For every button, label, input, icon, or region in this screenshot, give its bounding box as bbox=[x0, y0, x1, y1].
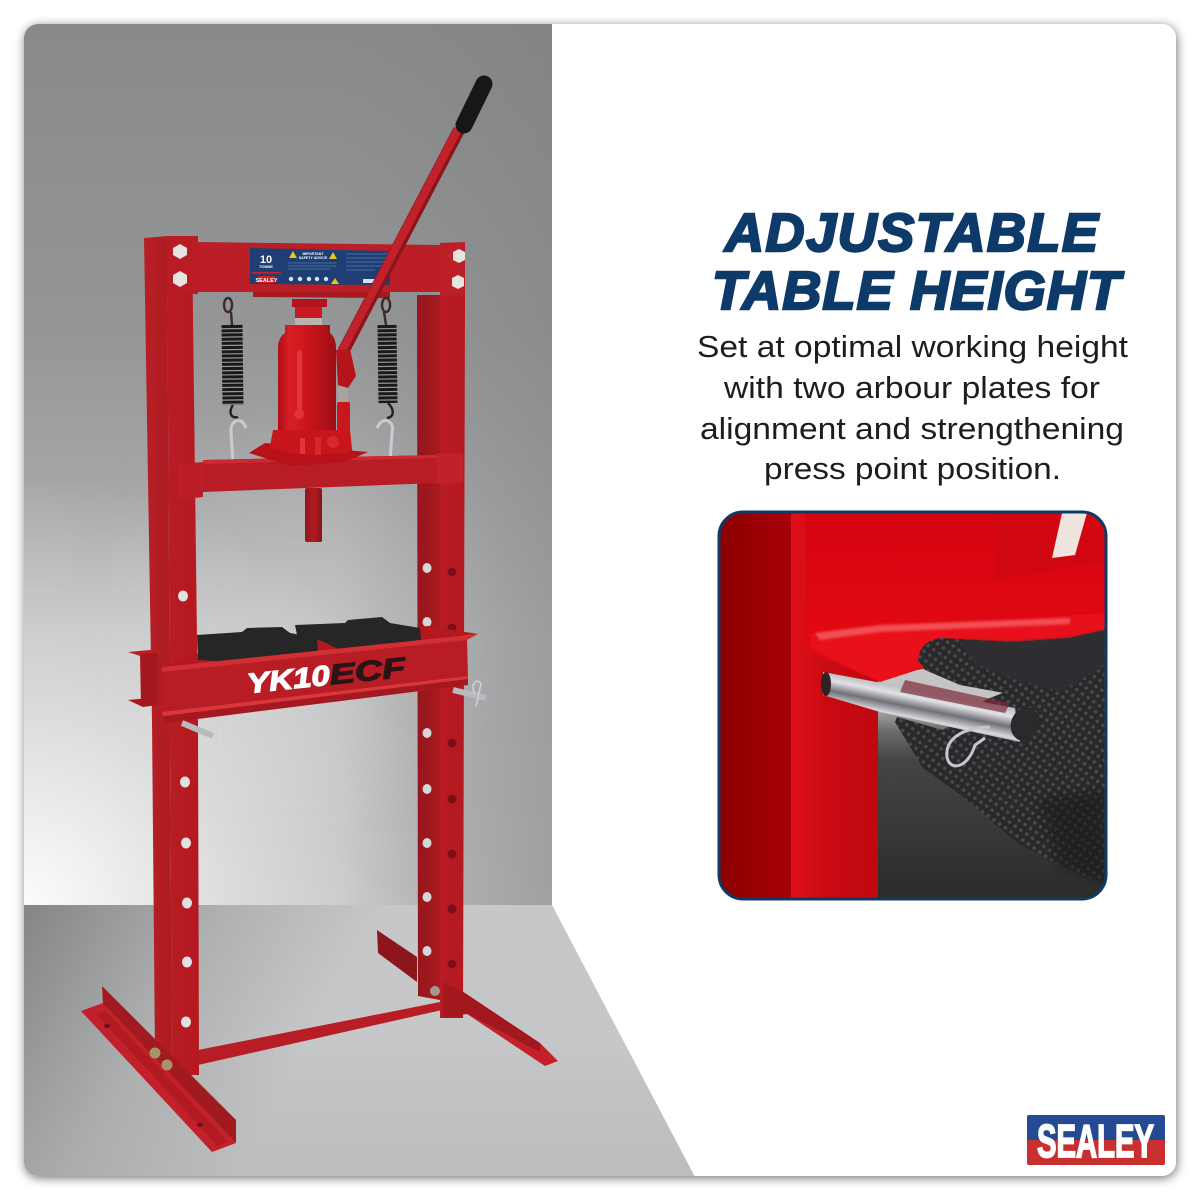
body text: Set at optimal working height bbox=[697, 329, 1128, 364]
left column holes bbox=[178, 590, 192, 1028]
upper glove finger bbox=[918, 630, 1107, 885]
left bracket with bolts bbox=[167, 236, 198, 295]
safety label: IMPORTANT bbox=[302, 252, 324, 256]
body text: press point position. bbox=[764, 451, 1061, 486]
locking pins bbox=[182, 681, 486, 744]
left spring and hook bbox=[224, 298, 246, 462]
main beam bbox=[162, 637, 468, 715]
table bed bbox=[128, 617, 486, 744]
hydraulic press illustration bbox=[81, 84, 558, 1152]
inset frame bbox=[719, 512, 1106, 899]
rubber grip bbox=[464, 84, 484, 125]
back foot bbox=[377, 930, 417, 982]
model lettering: YK10 bbox=[245, 660, 332, 699]
body text bbox=[697, 329, 1128, 486]
steel pin bbox=[821, 672, 1044, 745]
left side bracket bbox=[128, 650, 160, 707]
white lettering stripe bbox=[1052, 513, 1087, 558]
arbour plates bbox=[197, 617, 421, 662]
heading bbox=[712, 203, 1124, 321]
right column bbox=[417, 295, 465, 1018]
cross brace bbox=[198, 1002, 442, 1065]
model lettering bbox=[245, 652, 408, 699]
left column bbox=[144, 236, 199, 1075]
safety label: TONNE bbox=[259, 264, 273, 269]
wall bbox=[24, 24, 552, 905]
right spring and hook bbox=[377, 298, 393, 462]
right column holes bbox=[422, 563, 432, 956]
dark red column side bbox=[718, 511, 791, 901]
table top surface bbox=[162, 626, 478, 668]
floor bbox=[24, 905, 695, 1177]
lower black glove bbox=[895, 670, 1104, 880]
panel: product photo backdrop bbox=[24, 24, 695, 1177]
right bracket with bolts bbox=[440, 242, 465, 295]
safety label: 10 bbox=[260, 254, 272, 266]
heading: TABLE HEIGHT bbox=[712, 261, 1124, 321]
inset photo: locking pin being fitted by gloved hand bbox=[718, 511, 1108, 901]
heading: ADJUSTABLE bbox=[723, 203, 1100, 263]
middle crossbeam bbox=[178, 453, 463, 500]
table lip bbox=[878, 614, 1104, 682]
ram piston bbox=[305, 488, 322, 542]
lever handle bbox=[336, 84, 484, 388]
safety label: SAFETY ADVICE bbox=[299, 256, 328, 260]
safety label: SEALEY bbox=[255, 278, 278, 284]
safety label bbox=[250, 248, 390, 285]
body text: alignment and strengthening bbox=[700, 411, 1124, 446]
top beam bbox=[167, 236, 465, 298]
dark workshop background bbox=[878, 660, 1108, 900]
model lettering: ECF bbox=[328, 652, 408, 691]
red column front bbox=[790, 511, 878, 901]
front left foot bbox=[81, 986, 236, 1152]
bottle jack bbox=[249, 299, 368, 466]
front right foot bbox=[430, 982, 558, 1066]
body text: with two arbour plates for bbox=[723, 370, 1100, 405]
hairpin clip bbox=[947, 727, 990, 766]
red upper table bbox=[806, 511, 1107, 682]
